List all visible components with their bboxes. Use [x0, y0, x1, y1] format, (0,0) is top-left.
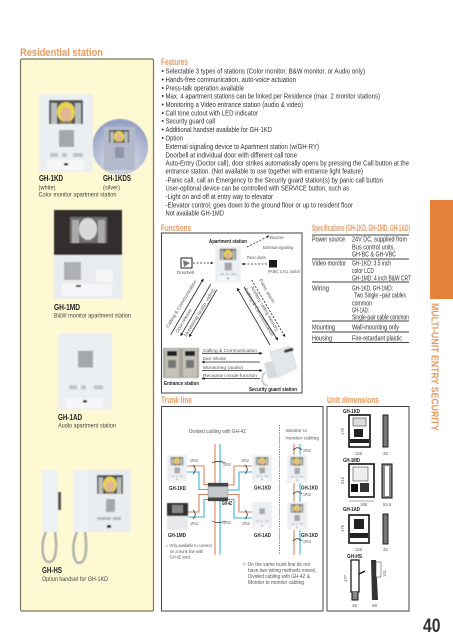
labels: wire counts: 1Px2	[190, 458, 198, 463]
icon: apartment station	[215, 246, 241, 282]
label: GH-1MD: GH-1MD	[54, 303, 80, 312]
drawing: GH-1KD dimensions	[340, 409, 388, 456]
table: specifications: Wiring	[312, 286, 329, 292]
note: mixed wiring: ☆ On the same trunk line do not	[242, 562, 310, 568]
label: security guard station: Security guard station	[249, 387, 297, 393]
text: calling and communication right: Calling & Communication	[243, 287, 275, 338]
panel: unit dimensions	[327, 406, 409, 611]
table: specifications: Single-pair cable common	[352, 314, 409, 322]
icon: panic call switch	[269, 260, 277, 268]
text block: features list: Max. 4 apartment stations can be linked per Residence (max. 2 monitor stations)	[166, 94, 380, 100]
icon: handset mounted on station	[73, 470, 131, 563]
labels: wire counts: 1Px2	[223, 520, 231, 525]
text block: features list: Call tone cutout with LED indicator	[166, 110, 259, 118]
arrow: buzzer	[247, 236, 269, 247]
text: silver: (silver)	[103, 186, 120, 192]
label: apartment station: Apartment station	[209, 239, 247, 245]
drawing: GH-HS dimensions: 48	[372, 603, 377, 608]
labels: station names: GH-1KD	[301, 486, 318, 492]
drawing: GH-1MD dimensions: 53.5	[383, 502, 391, 507]
text block: features list: Selectable 3 types of stations (Color monitor, B&W monitor, or Audio only)	[166, 68, 365, 76]
table: specifications: Fire-retardant plastic	[352, 336, 402, 342]
label: GH-HS: GH-HS	[42, 566, 63, 575]
text: divided cabling: Divided cabling with GH-4Z	[189, 429, 247, 435]
icon: monitor station top	[287, 455, 307, 483]
text and arrow: monitoring: Monitoring (audio)	[203, 365, 243, 370]
drawing: GH-1AD dimensions: 175	[340, 525, 345, 532]
drawing: GH-1KD dimensions: 32	[383, 451, 388, 456]
drawing: GH-1MD dimensions: GH-1MD	[343, 458, 360, 464]
drawing: GH-1MD dimensions	[340, 458, 392, 507]
text: audio station description: Audio apartment station	[58, 424, 116, 430]
text: auxiliary calling diagonal: Auxiliary calling memory	[250, 285, 280, 332]
labels: wire counts: 1Px2	[241, 458, 249, 463]
drawing: GH-1AD dimensions: 32	[383, 547, 388, 552]
labels: wire counts: 1Px2	[242, 521, 250, 526]
arrows: entrance to apartment	[171, 279, 217, 337]
table: specifications: Mounting	[312, 324, 335, 332]
text block: features list: -Light on and off at entry way to elevator	[166, 194, 274, 201]
table: specifications: Video monitor	[312, 260, 347, 268]
labels: station names: GH-4Z	[222, 501, 232, 507]
labels: station names: GH-1KD	[169, 486, 186, 492]
note: GH-1MD trunk restriction: GH-4Z used	[170, 554, 190, 560]
table: specifications: color LCD	[352, 268, 374, 275]
table: specifications: Two Single –pair cables	[354, 292, 406, 300]
labels: wire counts: 1Px2	[303, 448, 311, 453]
text block: features list: Hands-free communication, auto-voice actuation	[166, 77, 296, 84]
icon: monitor station bottom	[287, 502, 307, 530]
text: white: (white)	[38, 186, 56, 192]
text block: features list: entrance station. (Not available to use together with entrance light feature)	[166, 168, 363, 176]
icon: doorbell	[181, 258, 192, 268]
text: B&W monitor description: B&W monitor apartment station	[54, 314, 131, 320]
panel: trunk line diagram	[162, 406, 323, 611]
trunk line heading: Trunk line	[161, 395, 192, 405]
text: buzzer: Buzzer	[270, 235, 284, 240]
text block: features list	[162, 68, 409, 218]
label: entrance station: Entrance station	[164, 381, 199, 387]
text: external signaling: External signaling	[263, 245, 293, 250]
icon: GH-1KD station	[39, 94, 93, 172]
text: calling and communication left: Calling & Communication	[165, 279, 198, 329]
text: monitoring left: Monitoring (audio, video)	[183, 287, 216, 338]
icon: GH-1MD left station	[167, 503, 188, 530]
drawing: GH-1MD dimensions: 213	[340, 477, 345, 484]
text: handset description: Option handset for GH-1KD	[42, 577, 109, 583]
arrow: panic alarm	[242, 263, 267, 265]
text: door release left: Door release	[175, 307, 193, 334]
labels: station names: GH-1KD	[301, 533, 318, 539]
text and arrow: monitoring	[202, 365, 262, 370]
table: specifications: Wall-mounting only	[352, 324, 399, 332]
text and arrow: door release: Door release	[203, 356, 226, 361]
icon: wire loops	[193, 448, 302, 541]
text block: features list: Additional handset available for GH-1KD	[166, 127, 272, 134]
text and arrow: calling and communication: Calling & Communication	[203, 348, 257, 353]
label: GH-1KD: GH-1KD	[39, 174, 63, 183]
table: specifications: GH-BC & GH-VBC	[352, 252, 396, 258]
drawing: GH-HS dimensions	[343, 554, 387, 608]
note: GH-1MD trunk restriction: on a trunk line with	[170, 549, 203, 554]
label: GH-1AD: GH-1AD	[58, 413, 82, 422]
table: specifications: GH-1MD: 4 inch B&W CRT	[352, 276, 412, 282]
text block: features list: Security guard call	[166, 118, 215, 126]
icon: GH-4Z hub	[208, 483, 228, 501]
page number: 40	[423, 615, 441, 637]
drawing: GH-HS dimensions: 141	[382, 570, 387, 577]
drawing: GH-HS dimensions: 45	[352, 603, 357, 608]
section tab	[430, 200, 453, 299]
arrow: doorbell	[193, 262, 213, 264]
text block: features list: Press-talk operation available	[166, 86, 244, 92]
text block: features list: Option	[166, 136, 183, 142]
diagram: orange and cyan wiring	[187, 444, 300, 555]
text: panic call switch: PANIC CALL switch	[268, 269, 300, 274]
panel: functions diagram	[162, 233, 302, 393]
icon: silver station circle	[92, 119, 148, 175]
table: specifications: GH-1KD, GH-1MD:	[352, 286, 393, 292]
labels: wire counts: 1Px2	[190, 521, 198, 526]
features heading: Features	[161, 57, 188, 67]
labels: station names: GH-1KD	[254, 486, 271, 492]
text block: features list: Auto-Entry (Doctor call), door strikes automatically opens by pressing the Call button at the	[166, 160, 409, 168]
labels: station names: GH-1MD	[168, 533, 186, 539]
text block: features list: Monitoring a Video entrance station (audio & video)	[166, 102, 303, 109]
table: specifications: Power source	[312, 236, 345, 244]
table: specifications: Bus control units,	[352, 244, 395, 252]
section title: multi-unit entry security: MULTI-UNIT ENTRY SECURITY	[428, 303, 440, 431]
drawing: GH-1KD dimensions: 125	[355, 451, 362, 456]
labels: wire counts	[190, 448, 311, 544]
text block: features list: -Panic call, call an Emergency to the Security guard station(s) by panic call button	[166, 178, 383, 184]
functions heading: Functions	[161, 223, 191, 233]
drawing: GH-1AD dimensions	[340, 507, 388, 552]
labels: wire counts: 1Px2	[223, 462, 231, 467]
table: specifications: common	[352, 300, 372, 308]
text: color monitor description: Color monitor apartment station	[38, 192, 116, 198]
icon: GH-1KD left station	[167, 455, 187, 482]
table: specifications: 24V DC, supplied from	[352, 236, 407, 244]
drawing: GH-1KD dimensions: 175	[340, 428, 345, 435]
text block: features list: -Elevator control, goes down to the ground floor or up to resident floor	[166, 202, 354, 210]
icon: optional handset	[42, 470, 61, 562]
note: mixed wiring: Divided cabling with GH-4Z &	[248, 574, 310, 580]
text: doorbell: Doorbell	[177, 270, 194, 275]
text and arrow: door release	[202, 356, 260, 362]
text and arrow: reception mode: Reception mode function	[203, 373, 257, 378]
note: mixed wiring	[242, 562, 316, 586]
icon: security guard phone	[262, 346, 297, 386]
table: specifications: GH-1KD: 3.5 inch	[352, 260, 391, 268]
drawing: GH-HS dimensions: GH-HS	[347, 554, 362, 560]
drawing: GH-1KD dimensions: GH-1KD	[343, 409, 360, 415]
text block: features list: Doorbell at individual door with different call tone	[166, 152, 297, 160]
drawing: GH-1AD dimensions: 125	[355, 547, 362, 552]
icon: GH-1AD station	[58, 333, 112, 410]
unit dimensions heading: Unit dimensions	[327, 395, 379, 405]
note: GH-1MD trunk restriction: ☆ Only available to connect	[165, 543, 213, 548]
table: specifications	[312, 235, 412, 342]
labels: wire counts: 1Px2	[303, 492, 311, 497]
icon: GH-1MD station	[54, 210, 122, 299]
text: panic alarm diagonal: Panic alarm	[258, 278, 276, 304]
labels: station names	[168, 486, 318, 539]
text: monitor to monitor cabling: monitor cabling	[286, 436, 319, 440]
drawing: GH-HS dimensions: 177	[343, 575, 348, 582]
residential station heading: Residential station	[20, 47, 103, 59]
note: GH-1MD trunk restriction	[165, 543, 213, 560]
text: monitor to monitor cabling: Monitor to	[286, 428, 307, 433]
labels: wire counts: 1Px2	[303, 539, 311, 544]
label: GH-1KDS: GH-1KDS	[103, 174, 132, 183]
text block: features list: External signaling device to Apartment station (w/GH-RY)	[166, 144, 319, 151]
icon: entrance station	[163, 348, 199, 378]
table: specifications: Housing	[312, 336, 332, 342]
panel: residential stations	[20, 59, 154, 611]
drawing: GH-1AD dimensions: GH-1AD	[343, 507, 360, 513]
arrows: guard to apartment	[237, 280, 285, 345]
text block: features list: Not available GH-1MD	[166, 210, 224, 218]
note: mixed wiring: Monitor to monitor cabling	[248, 580, 304, 586]
drawing: GH-1MD dimensions: 168	[360, 502, 367, 507]
labels: station names: GH-1AD	[254, 533, 271, 539]
text block: features list: User-optional device can be controlled with SERVICE button, such as	[166, 186, 349, 192]
text: panic alarm: Panic alarm	[247, 255, 266, 260]
text: monitor to monitor cabling	[286, 428, 319, 440]
icon: GH-1KD right station	[252, 455, 272, 482]
note: mixed wiring: have two wiring methods mixed,	[248, 568, 316, 574]
icon: GH-1AD right station	[252, 502, 272, 529]
table: specifications: GH-1AD:	[352, 308, 369, 314]
